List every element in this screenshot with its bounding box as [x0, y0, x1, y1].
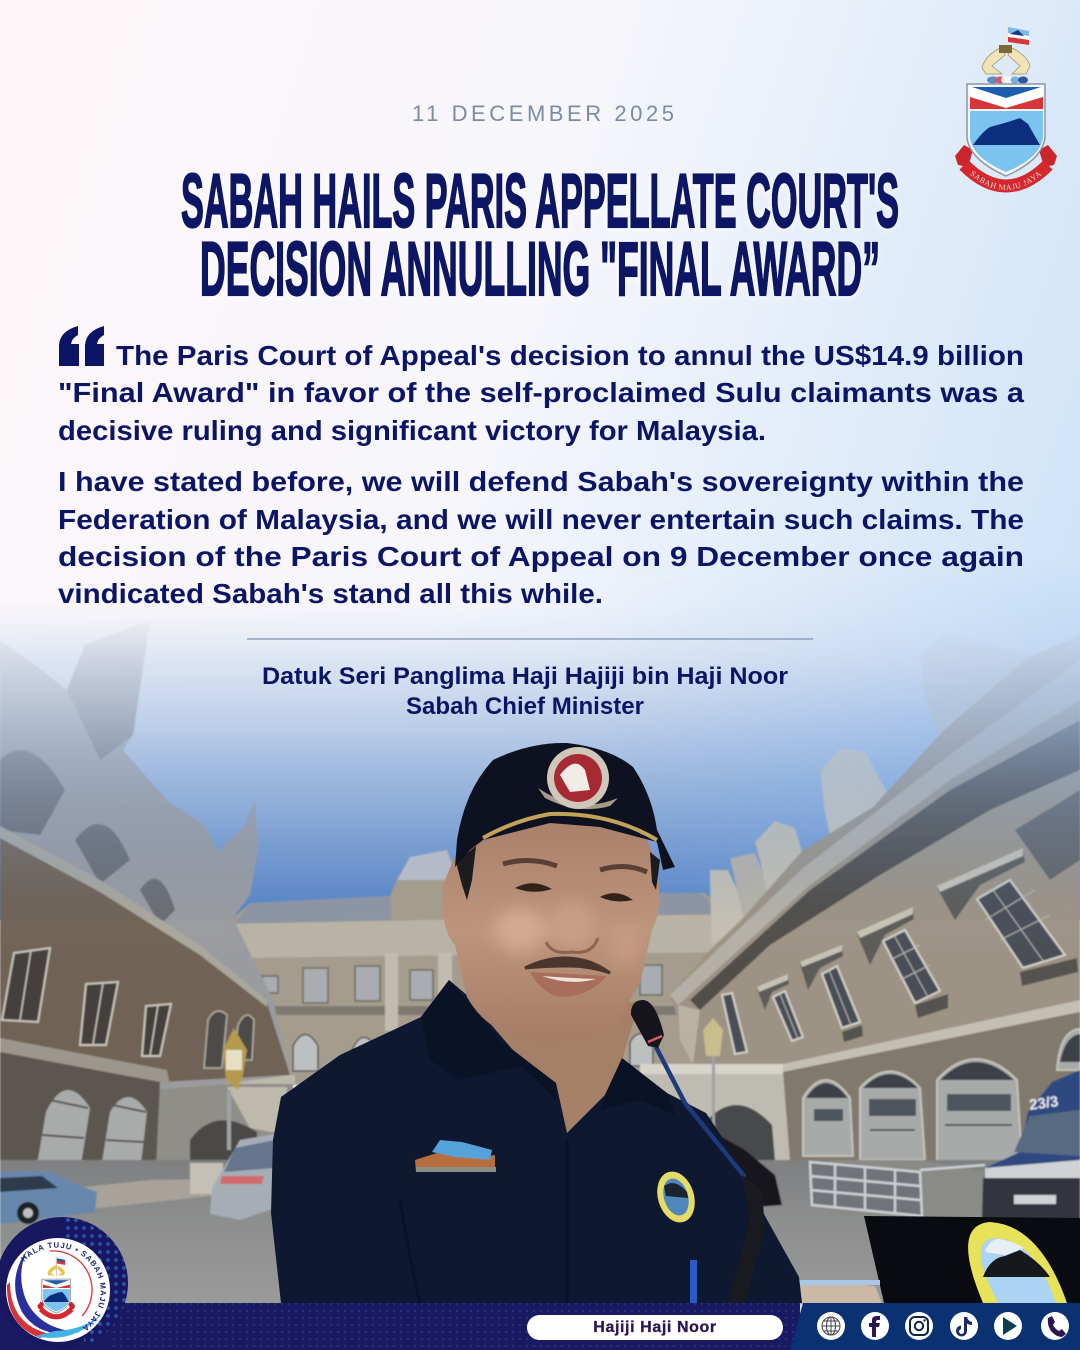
- cap: [455, 743, 675, 870]
- brows: [503, 860, 647, 872]
- laptop with emblem: [864, 1216, 1080, 1303]
- centre building: [225, 850, 740, 1085]
- face: [442, 820, 659, 1041]
- quote text: paragraph 2: Federation of Malaysia, and we will never entertain such claims. The: [58, 504, 1024, 535]
- pen: [690, 1260, 697, 1303]
- shirt: [271, 980, 802, 1303]
- icon: Sabah coat of arms: [955, 24, 1057, 192]
- icon: instagram: [905, 1312, 933, 1340]
- quote text: paragraph 2: [58, 466, 1024, 609]
- right building: [670, 633, 1080, 1175]
- hair: [456, 846, 660, 900]
- attribution: Sabah Chief Minister: [406, 693, 644, 720]
- icon: play: [994, 1312, 1022, 1340]
- quote text: paragraph 2: vindicated Sabah's stand all this while.: [58, 578, 603, 609]
- badge: Hala Tuju Sabah Maju Jaya: HALA TUJU • SABAH MAJU JAYA: [20, 1242, 106, 1330]
- dark car: [722, 1137, 782, 1208]
- neck: [470, 1000, 640, 1133]
- lectern: [749, 1280, 882, 1303]
- upper windows: [722, 880, 1065, 1054]
- eyes: [515, 883, 633, 901]
- icon: Sabah coat of arms: SABAH MAJU JAYA: [970, 171, 1042, 190]
- date: 11 DECEMBER 2025: [412, 101, 674, 126]
- quote text: paragraph 1: decisive ruling and significant victory for Malaysia.: [58, 415, 766, 446]
- handle pill: [527, 1315, 783, 1340]
- vehicle: blue car: [0, 1171, 97, 1224]
- icon: phone: [1041, 1312, 1069, 1340]
- mouth: [530, 972, 607, 997]
- footer bar: right: [790, 1303, 1080, 1350]
- barriers: [810, 1162, 985, 1216]
- pediments: [757, 850, 1025, 1010]
- title: [181, 159, 899, 312]
- icon: tiktok: [950, 1312, 978, 1340]
- attribution: Datuk Seri Panglima Haji Hajiji bin Haji Noor: [262, 663, 788, 690]
- icon: laptop emblem: [968, 1222, 1067, 1303]
- quote text: paragraph 1: "Final Award" in favor of the self-proclaimed Sulu claimants was a: [58, 377, 1025, 408]
- portrait: Hajiji Noor: [271, 743, 802, 1303]
- lower right wall: [640, 1064, 815, 1170]
- vehicle: police van: 23/3: [1028, 1093, 1059, 1114]
- handle pill: Hajiji Haji Noor: [593, 1319, 717, 1336]
- icon: badge coat of arms: [37, 1257, 75, 1317]
- vehicle: police van: [982, 1070, 1080, 1220]
- ground: [0, 1160, 1080, 1304]
- lamp: right: [703, 1018, 723, 1131]
- vehicle: small van: [210, 1134, 275, 1220]
- cap piping: [483, 814, 657, 840]
- icon: facebook: [861, 1312, 889, 1340]
- background photo: Paris courthouse: [0, 620, 1080, 1304]
- attribution: [262, 663, 788, 720]
- badge: Hala Tuju Sabah Maju Jaya: [0, 1217, 128, 1342]
- lower left wall: [150, 1075, 295, 1186]
- quote text: paragraph 1: [58, 340, 1025, 446]
- collar: [421, 980, 675, 1115]
- icon: opening quote mark: [59, 326, 104, 366]
- shirt badge: [651, 1167, 701, 1227]
- sky: [0, 598, 1080, 920]
- cheek highlights: [494, 901, 639, 967]
- lamp: left: [223, 1028, 247, 1150]
- nose: [546, 938, 598, 953]
- shirt logo: [415, 1140, 496, 1172]
- arched windows: [803, 1029, 1080, 1163]
- shirt folds: [400, 1140, 567, 1303]
- moustache: [525, 958, 610, 973]
- quote text: paragraph 1: The Paris Court of Appeal's decision to annul the US$14.9 billion: [116, 340, 1024, 371]
- social icons: [817, 1312, 1069, 1340]
- plinth: [190, 1163, 223, 1194]
- quote text: paragraph 2: decision of the Paris Court of Appeal on 9 December once again: [58, 541, 1024, 572]
- quote text: paragraph 2: I have stated before, we will defend Sabah's sovereignty within the: [58, 466, 1024, 497]
- footer bar: left: [0, 1303, 800, 1350]
- rubble: [830, 1160, 985, 1215]
- pavement: [0, 1178, 290, 1220]
- microphone: [631, 1000, 765, 1303]
- cap badge: [538, 747, 618, 809]
- left building: [0, 620, 290, 1195]
- icon: globe: [817, 1312, 845, 1340]
